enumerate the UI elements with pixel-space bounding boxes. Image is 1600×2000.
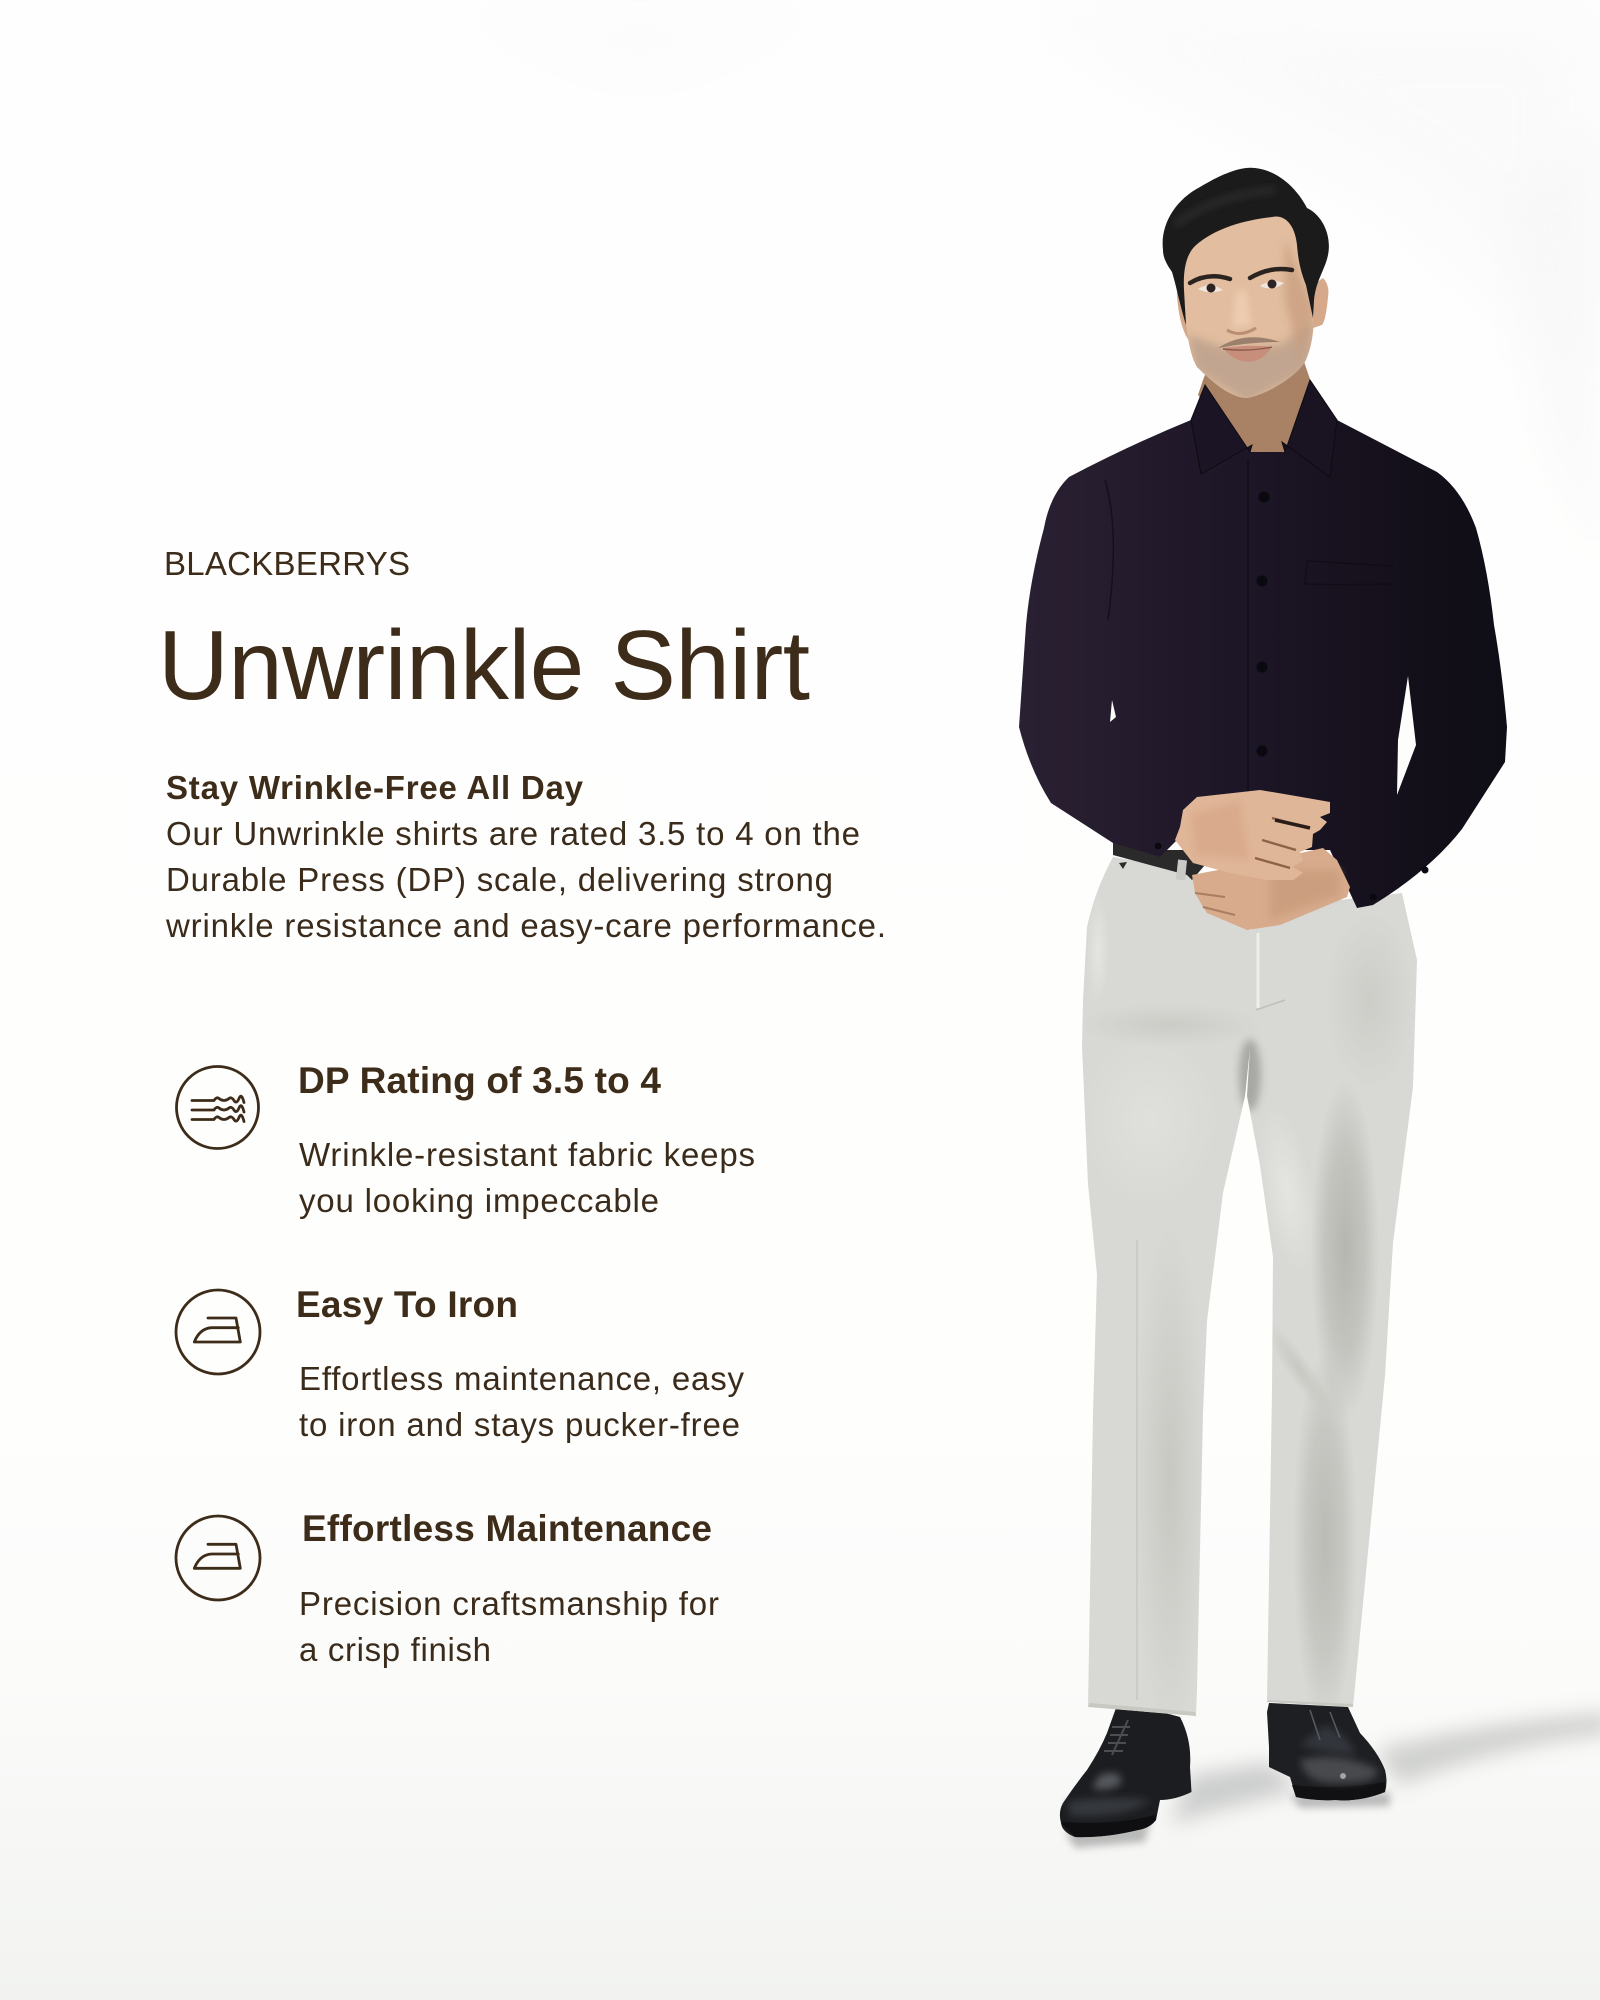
face: [1180, 205, 1314, 398]
model figure: [1019, 168, 1507, 1837]
shirt buttons: [1154, 492, 1428, 900]
feature text: you looking impeccable: [299, 1182, 659, 1219]
feature text: [299, 1585, 719, 1668]
shirt: [1019, 380, 1507, 908]
feature text: a crisp finish: [299, 1631, 491, 1668]
feature: effortless maintenance: [176, 1508, 719, 1668]
feature text: Wrinkle-resistant fabric keeps: [299, 1136, 755, 1173]
ears: [1177, 278, 1328, 342]
feature: DP rating: [176, 1060, 755, 1219]
hair: [1163, 168, 1329, 325]
arm gaps: [1110, 676, 1416, 795]
neck: [1198, 350, 1312, 462]
nose and mouth: [1218, 328, 1280, 362]
hands: [1175, 790, 1350, 930]
intro body: [165, 815, 886, 944]
feature text: [299, 1360, 744, 1443]
floor shadows: [1065, 1712, 1600, 1848]
feature text: to iron and stays pucker-free: [299, 1406, 740, 1443]
brand label: BLACKBERRYS: [164, 545, 410, 582]
title: Unwrinkle Shirt: [158, 610, 810, 720]
eyebrows: [1190, 269, 1292, 283]
icon: iron: [176, 1516, 260, 1600]
intro body: wrinkle resistance and easy-care performance.: [165, 907, 886, 944]
feature heading: Easy To Iron: [296, 1284, 518, 1325]
intro heading: Stay Wrinkle-Free All Day: [166, 769, 584, 806]
feature text: [299, 1136, 755, 1219]
feature heading: Effortless Maintenance: [302, 1508, 712, 1549]
shoes: [1060, 1703, 1386, 1837]
icon: iron: [176, 1290, 260, 1374]
intro text block: [165, 769, 886, 944]
feature text: Precision craftsmanship for: [299, 1585, 719, 1622]
eyes: [1198, 280, 1284, 292]
intro body: Our Unwrinkle shirts are rated 3.5 to 4 on the: [166, 815, 860, 852]
feature: easy to iron: [176, 1284, 744, 1443]
belt: [1113, 843, 1205, 880]
shirt seams: [1105, 460, 1394, 840]
feature heading: DP Rating of 3.5 to 4: [298, 1060, 661, 1101]
feature text: Effortless maintenance, easy: [299, 1360, 744, 1397]
head: [1163, 168, 1329, 402]
trousers: [1075, 857, 1417, 1740]
collar: [1191, 385, 1252, 474]
icon: fabric waves: [176, 1066, 258, 1148]
intro body: Durable Press (DP) scale, delivering strong: [166, 861, 833, 898]
